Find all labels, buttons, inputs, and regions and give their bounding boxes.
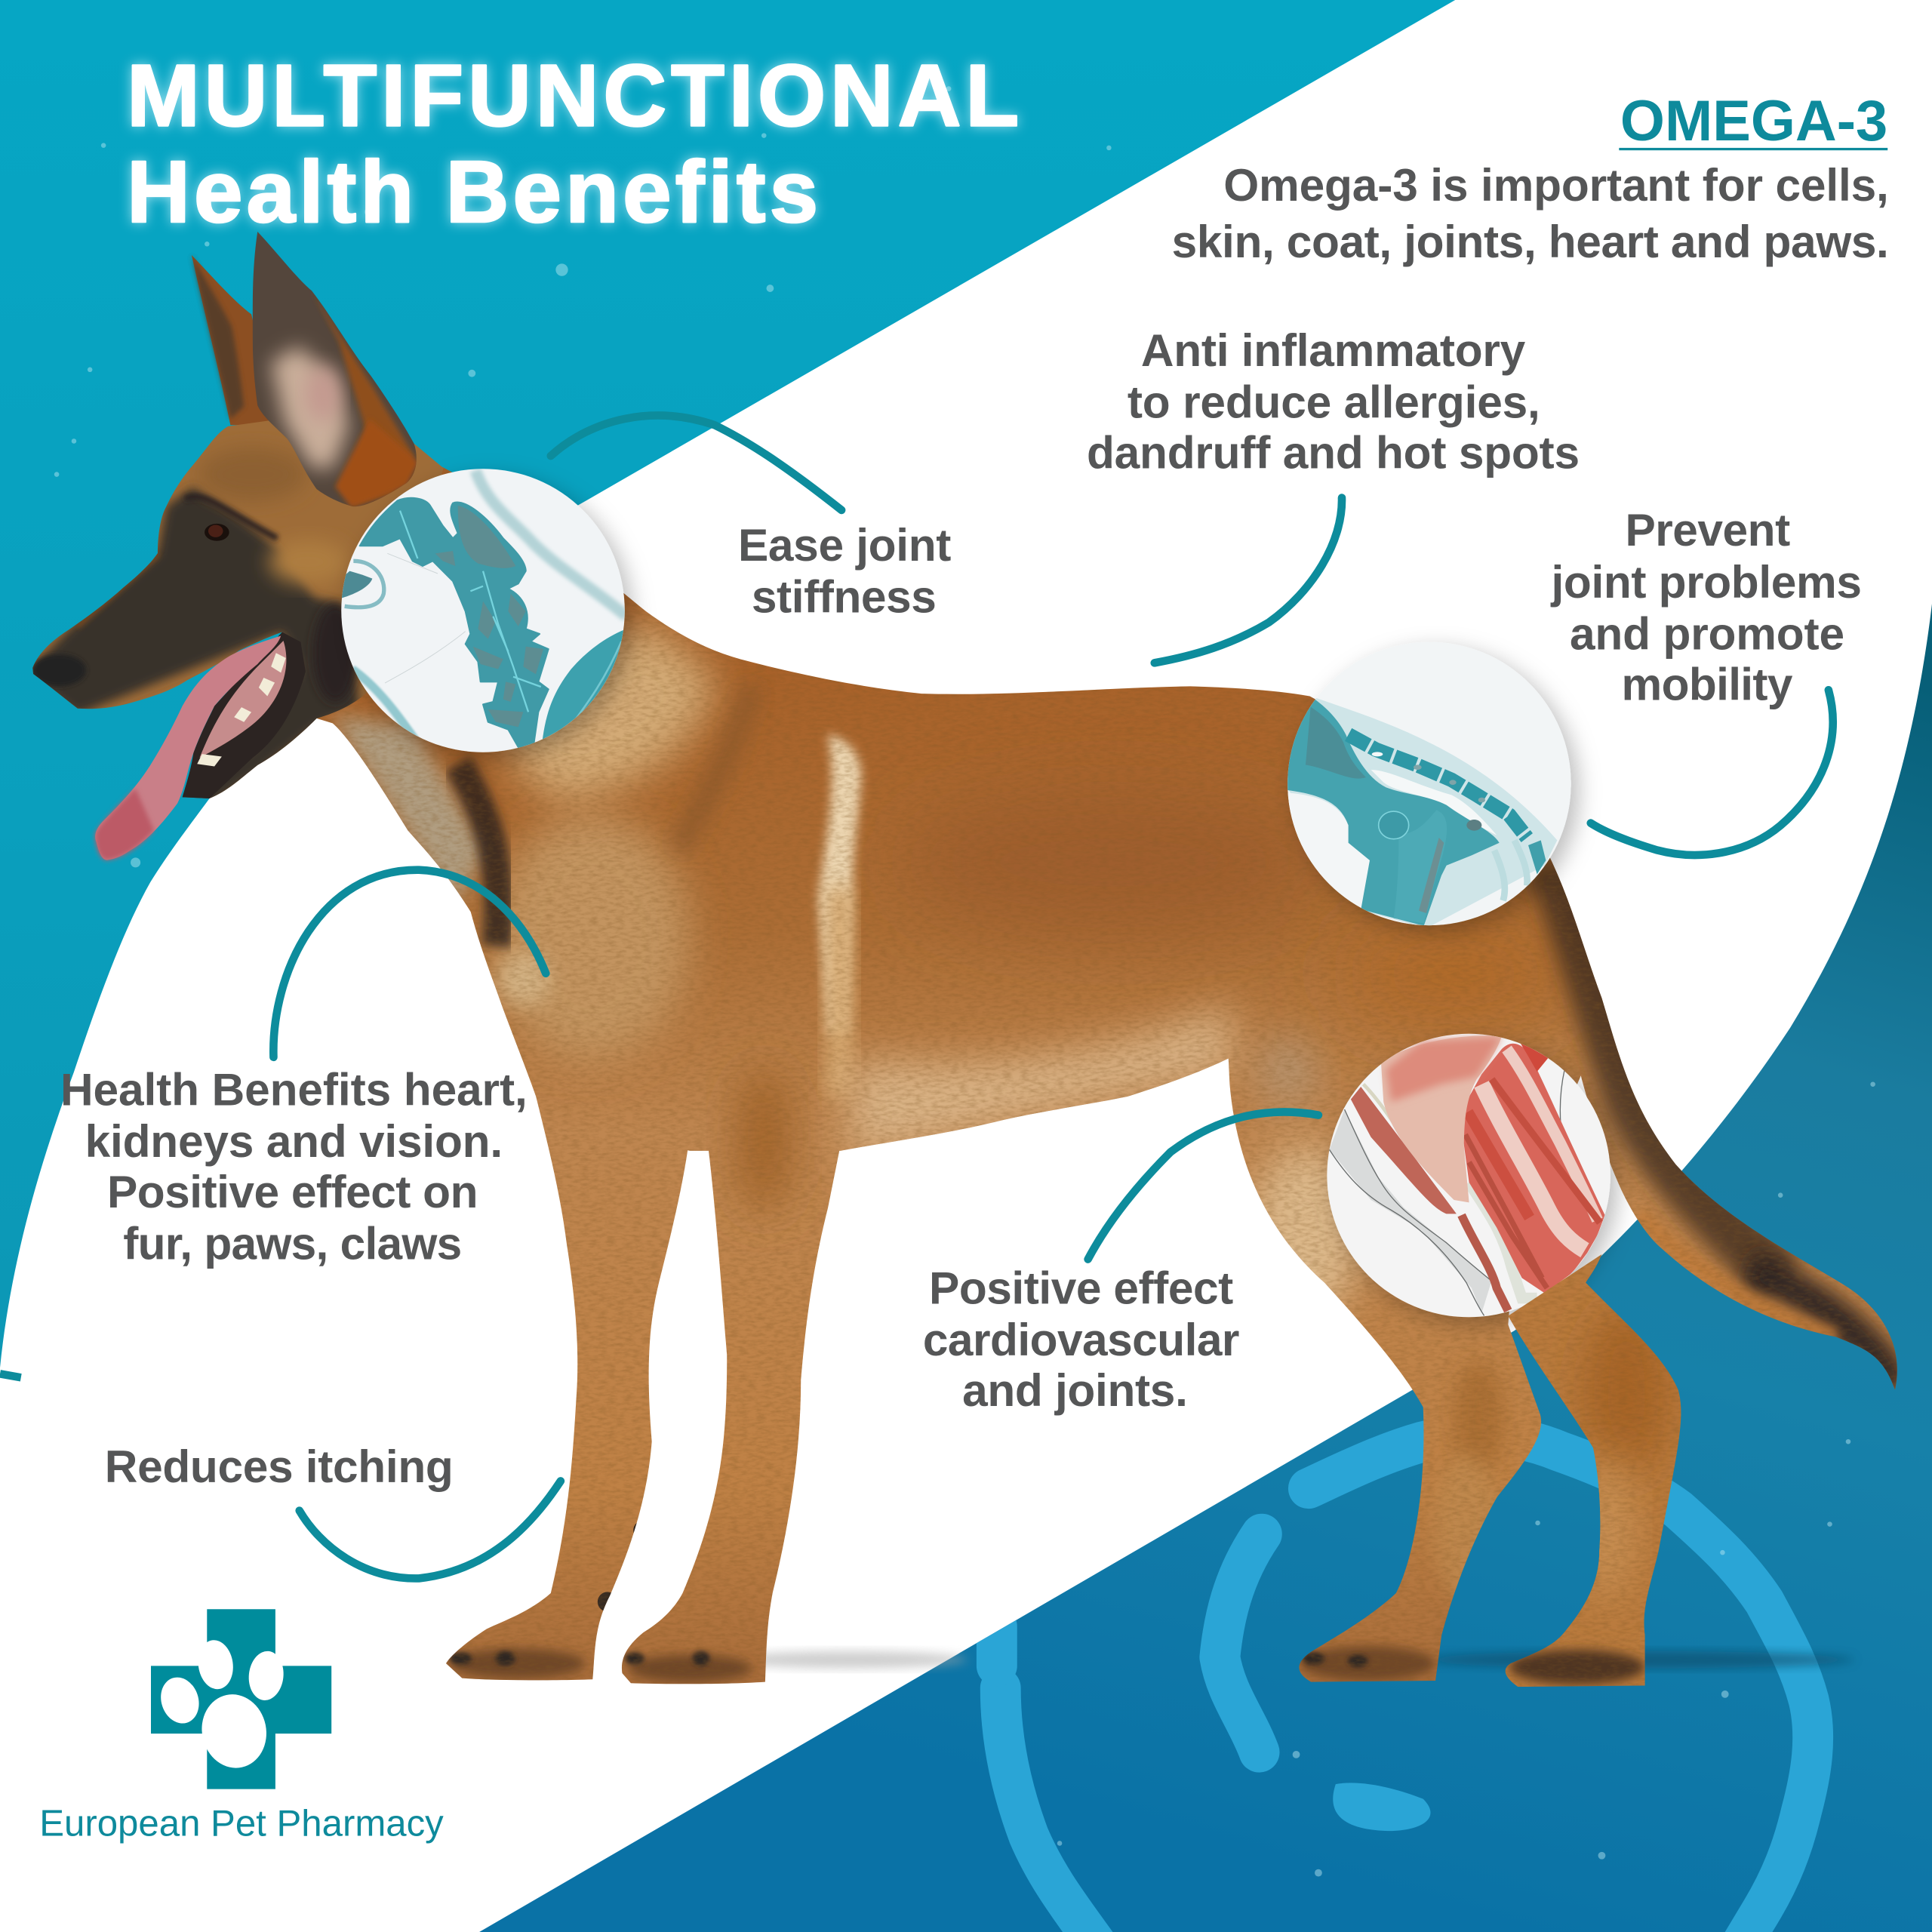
- ear orange base: [335, 419, 419, 508]
- ear inner fur: [271, 346, 349, 468]
- text: ease joint stiffness: stiffness: [752, 571, 937, 622]
- omega-3 description: Omega-3 is important for cells,: [1223, 159, 1889, 211]
- left loop: [345, 561, 384, 608]
- omega-3 block: [1172, 89, 1889, 267]
- translucent pelvis area: [1285, 697, 1557, 928]
- sacral vertebrae: [1349, 734, 1527, 838]
- omega-3 description: skin, coat, joints, heart and paws.: [1172, 216, 1889, 267]
- top-left teal background panel: [0, 0, 1455, 1367]
- ear rim: [312, 291, 414, 506]
- cheek patch: [269, 540, 347, 584]
- body silhouette fill: [247, 444, 1932, 1700]
- logo: european pet pharmacy: [39, 1609, 444, 1844]
- dog body: [25, 222, 1932, 1700]
- back ear: [192, 255, 277, 425]
- text: reduces itching: Reduces itching: [105, 1441, 454, 1492]
- text: prevent joint problems: Prevent: [1625, 504, 1790, 555]
- text: health benefits: kidneys and vision.: [85, 1115, 503, 1167]
- text: anti inflammatory: Anti inflammatory: [1141, 325, 1526, 376]
- pelvis shade: [1306, 707, 1366, 779]
- bottom-right blue background panel: [479, 604, 1932, 1932]
- brow: [185, 497, 277, 538]
- red strand two: [1468, 1112, 1530, 1217]
- fur texture: [247, 444, 1932, 1700]
- black muzzle mask: [25, 487, 360, 807]
- logo middle toe: [195, 1638, 236, 1691]
- lower muscle: [1462, 1215, 1508, 1311]
- spine shaded plates: [435, 506, 543, 727]
- neck joint circle: [340, 469, 636, 768]
- title: [127, 47, 1019, 241]
- red strand three: [1466, 1134, 1547, 1288]
- gap under vertebrae: [1371, 770, 1497, 835]
- dog rear leg: [1491, 1244, 1700, 1700]
- text: anti inflammatory: dandruff and hot spots: [1087, 426, 1580, 478]
- translucent neck band: [475, 470, 626, 617]
- left blob: [340, 571, 372, 598]
- thin nerve line: [385, 553, 466, 683]
- left edge tick: [0, 1374, 21, 1377]
- logo cross: [151, 1609, 331, 1789]
- left muscle: [1351, 1087, 1457, 1214]
- omega-3 heading: OMEGA-3: [1620, 89, 1887, 153]
- red strand one: [1492, 1079, 1600, 1223]
- logo wordmark: European Pet Pharmacy: [39, 1804, 444, 1844]
- background paw print outline: [997, 1435, 1813, 1932]
- pelvis bone: [1283, 698, 1500, 926]
- tendon: [1469, 1183, 1570, 1298]
- thigh muscle circle: [1327, 1034, 1611, 1317]
- paw outer ring: [1309, 1435, 1813, 1932]
- forehead shading: [198, 448, 307, 501]
- hip joint circle: [1283, 642, 1571, 928]
- omega-3 description: [1172, 159, 1889, 267]
- grey sheath: [1330, 1109, 1492, 1313]
- logo left toe: [155, 1672, 205, 1728]
- title line one: MULTIFUNCTIONAL: [127, 47, 1019, 145]
- ear pink tint: [306, 368, 340, 421]
- shoulder blade: [542, 629, 636, 768]
- ground shadows: [733, 1651, 1854, 1669]
- paw claws: [450, 1651, 1367, 1667]
- text: anti inflammatory: to reduce allergies,: [1128, 376, 1540, 427]
- curve: ease joint stiffness: [551, 416, 841, 510]
- paw left arc upper: [984, 1626, 1009, 1666]
- lower tail bone: [1528, 840, 1546, 874]
- text: ease joint stiffness: Ease joint: [738, 519, 951, 571]
- hip socket: [1379, 811, 1409, 839]
- teeth: [197, 653, 286, 767]
- shadow on blue: [1423, 1651, 1854, 1669]
- paw left arc: [1001, 1688, 1103, 1932]
- text: ease joint stiffness: [738, 519, 951, 622]
- paw inner arc: [1220, 1534, 1262, 1752]
- logo paw pad: [195, 1688, 273, 1774]
- head: [25, 407, 444, 807]
- curve: reduces itching: [300, 1481, 561, 1578]
- text: prevent joint problems: [1551, 504, 1862, 709]
- text: health benefits: fur, paws, claws: [123, 1218, 462, 1269]
- curve: health benefits: [273, 870, 546, 1057]
- callout curves: [0, 416, 1833, 1578]
- red top corner: [1519, 1041, 1549, 1072]
- omega-3 underline: [1619, 148, 1887, 150]
- text: positive effect: [923, 1262, 1239, 1416]
- text: positive effect: Positive effect: [929, 1262, 1233, 1313]
- jaw and mouth: [183, 632, 306, 798]
- text: positive effect: and joints.: [962, 1364, 1188, 1416]
- pale strand two: [1507, 1049, 1598, 1220]
- femur shaft: [1394, 810, 1447, 923]
- sheath lines: [1330, 1069, 1564, 1315]
- curve: anti inflammatory: [1155, 498, 1342, 663]
- logo right toe: [247, 1650, 286, 1702]
- white lower-left area: [1283, 792, 1371, 911]
- pink muscle sheet: [1381, 1035, 1502, 1202]
- snout top tint: [76, 553, 158, 626]
- eye: [205, 524, 229, 541]
- front ear: [247, 222, 431, 518]
- shadow on white: [733, 1651, 968, 1669]
- text: health benefits: Health Benefits heart,: [60, 1063, 528, 1115]
- text: prevent joint problems: mobility: [1622, 658, 1793, 709]
- spine: [360, 498, 549, 747]
- curve: prevent joint problems: [1591, 690, 1833, 855]
- text: positive effect: cardiovascular: [923, 1314, 1239, 1365]
- main muscle bundle: [1462, 1044, 1605, 1293]
- title line two: Health Benefits: [127, 143, 818, 241]
- paw centre dot: [1333, 1783, 1430, 1831]
- tongue: [95, 635, 281, 860]
- text: anti inflammatory: [1087, 325, 1580, 478]
- pale strand one: [1481, 1084, 1585, 1251]
- mouth interior: [199, 641, 286, 758]
- pink muscle blush: [1386, 1036, 1502, 1102]
- tongue tip tint: [96, 789, 154, 860]
- eye highlight: [208, 525, 223, 537]
- vertebra holes: [1372, 752, 1485, 802]
- lower translucent band: [352, 669, 415, 740]
- curve: positive effect: [1088, 1112, 1318, 1260]
- fur shading: [331, 616, 1895, 1682]
- spine highlights: [400, 511, 541, 712]
- text: prevent joint problems: and promote: [1570, 608, 1844, 659]
- jaw shadow: [313, 604, 357, 703]
- nose: [32, 654, 86, 686]
- text: health benefits: Positive effect on: [107, 1166, 478, 1217]
- pale ribs: [1494, 840, 1527, 900]
- text: prevent joint problems: joint problems: [1551, 556, 1862, 608]
- left pale tendon: [1364, 1084, 1419, 1160]
- text: health benefits: [60, 1063, 528, 1269]
